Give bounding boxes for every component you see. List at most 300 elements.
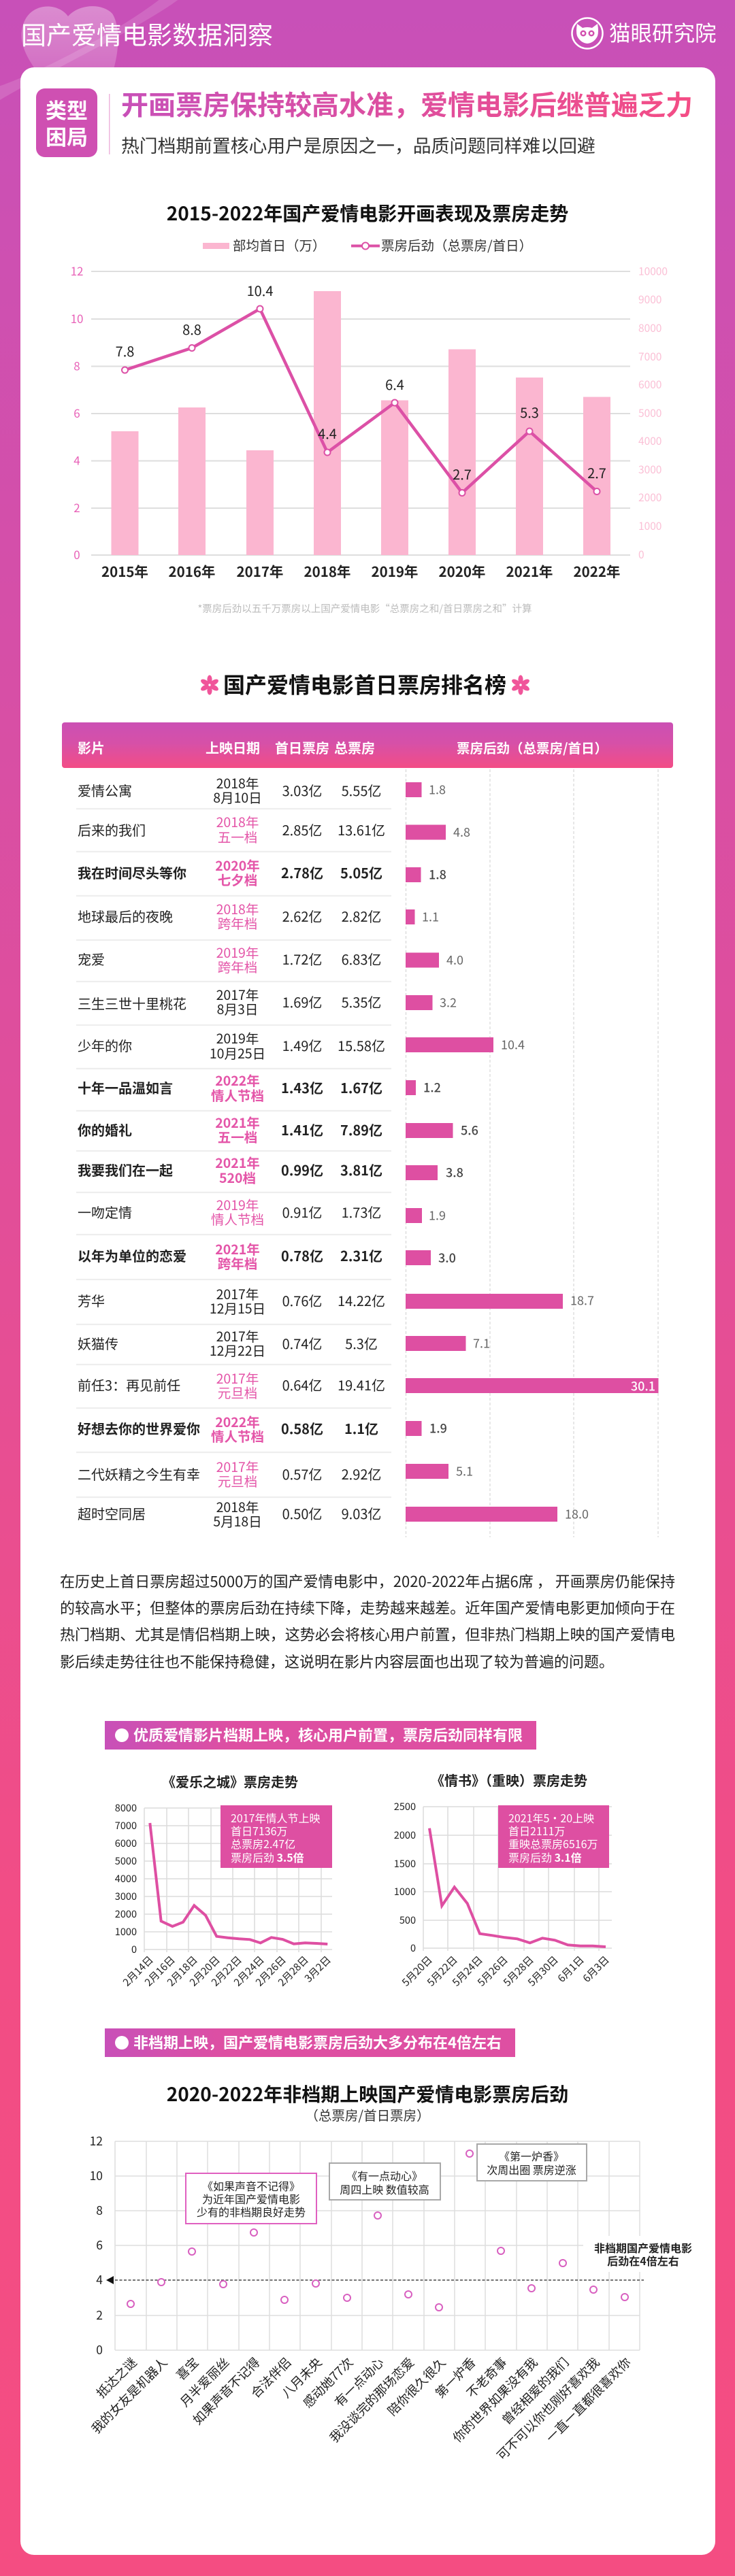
row: 我要我们在一起: 3.8: [446, 1163, 463, 1181]
row: 宠爱: 宠爱: [78, 949, 105, 969]
row: 以年为单位的恋爱: 跨年档: [218, 1253, 257, 1273]
row: 十年一品温如言: 2022年: [215, 1070, 260, 1090]
x axis movie labels: 我没谈完的那场恋爱: [325, 2354, 418, 2446]
row: 妖猫传: 2017年: [216, 1326, 259, 1345]
row: 以年为单位的恋爱: 以年为单位的恋爱: [78, 1245, 186, 1265]
row: 十年一品温如言: [78, 1070, 441, 1105]
row: 少年的你: 10月25日: [210, 1043, 265, 1063]
x axis movie labels: 八月未央: [278, 2354, 325, 2402]
left axis labels: 12: [71, 262, 83, 279]
row: 超时空同居: 5月18日: [213, 1511, 262, 1530]
callout: 有一点动心: 周四上映 数值较高: [340, 2181, 429, 2197]
callout: 首日2111万: [508, 1822, 566, 1839]
y axis labels: 500: [399, 1913, 416, 1927]
chart title: 2020-2022年非档期上映国产爱情电影票房后劲: [167, 2080, 568, 2107]
row: 二代妖精之今生有幸: 2.92亿: [342, 1464, 381, 1484]
body paragraph: 在历史上首日票房超过5000万的国产爱情电影中，2020-2022年占据6席 ， 开画票房仍能保持: [60, 1570, 675, 1592]
right axis labels: 2000: [638, 490, 662, 505]
row: 妖猫传: 妖猫传: [78, 1333, 118, 1353]
table header: 首日票房: [275, 737, 329, 757]
data labels: 6.4: [385, 374, 404, 394]
row: 爱情公寓: 8月10日: [213, 787, 262, 807]
row: 你的婚礼: 五一档: [218, 1126, 257, 1146]
row: 二代妖精之今生有幸: 5.1: [456, 1462, 473, 1480]
y axis labels: 6: [96, 2237, 103, 2254]
callout: 2017年情人节上映: [231, 1809, 321, 1826]
grid: [423, 1807, 612, 1951]
reference arrow: [106, 2276, 114, 2284]
legend: 票房后劲（总票房/首日）: [381, 235, 532, 254]
row: 好想去你的世界爱你: 2022年: [215, 1411, 260, 1431]
row: 以年为单位的恋爱: 2021年: [215, 1239, 260, 1258]
trend line: [429, 1828, 606, 1947]
row: 地球最后的夜晚: 2018年: [216, 899, 259, 918]
reference line at 4: [115, 2279, 644, 2281]
row: 地球最后的夜晚: 2.62亿: [282, 906, 322, 926]
x axis labels: 2月22日: [208, 1953, 245, 1989]
x axis labels: 5月22日: [424, 1953, 461, 1989]
table header: 票房后劲（总票房/首日）: [457, 737, 608, 757]
y axis labels: 5000: [115, 1854, 137, 1868]
headline: 开画票房保持较高水准，爱情电影后继普遍乏力: [121, 83, 693, 122]
row: 前任3：再见前任: 2017年: [216, 1368, 259, 1388]
dashed guide lines: [406, 769, 658, 1537]
table header: 上映日期: [206, 737, 260, 757]
ranking table: [62, 722, 673, 1537]
x axis labels: 2月26日: [252, 1953, 289, 1989]
row: 爱情公寓: 1.8: [429, 781, 446, 799]
y axis labels: 0: [131, 1942, 137, 1956]
row: 超时空同居: [78, 1496, 589, 1530]
body paragraph: [60, 1570, 675, 1672]
row: 芳华: 14.22亿: [338, 1290, 385, 1310]
grid: [144, 1808, 332, 1952]
row: 妖猫传: 12月22日: [210, 1340, 265, 1360]
row: 一吻定情: 1.9: [429, 1207, 446, 1224]
row: 我要我们在一起: 520档: [219, 1167, 256, 1187]
x axis movie labels: 喜宝: [172, 2354, 202, 2383]
row: 你的婚礼: 5.6: [461, 1121, 478, 1139]
row: 后来的我们: 13.61亿: [338, 820, 385, 839]
callout: 第一炉香: [477, 2144, 587, 2181]
sub headline: 热门档期前置核心用户是原因之一，品质问题同样难以回避: [121, 131, 595, 158]
x axis movie labels: [87, 2354, 634, 2464]
x axis movie labels: 不老奇事: [463, 2354, 510, 2402]
row: 二代妖精之今生有幸: 0.57亿: [282, 1464, 322, 1484]
row: 二代妖精之今生有幸: [78, 1456, 473, 1490]
y axis labels: 1000: [394, 1884, 416, 1898]
row: 你的婚礼: 7.89亿: [340, 1120, 382, 1139]
row: 前任3：再见前任: 0.64亿: [282, 1375, 322, 1394]
logo: cat eye research institute: 猫眼研究院: [609, 16, 717, 48]
x axis labels: [399, 1953, 612, 1989]
row: 爱情公寓: 5.55亿: [342, 780, 381, 800]
year labels: 2016年: [169, 561, 215, 581]
x axis movie labels: 如果声音不记得: [189, 2354, 263, 2428]
y axis labels: 1500: [394, 1856, 416, 1871]
right axis labels: 6000: [638, 377, 662, 392]
x axis labels: 2月14日: [120, 1953, 157, 1989]
y axis labels: 4000: [115, 1871, 137, 1886]
right axis labels: 10000: [638, 264, 668, 279]
callout: 2021年5·20上映: [508, 1809, 594, 1826]
row: 后来的我们: 后来的我们: [78, 820, 146, 839]
x axis labels: 2月20日: [186, 1953, 223, 1989]
row: 前任3：再见前任: 前任3：再见前任: [78, 1375, 180, 1394]
x axis movie labels: 我的女友是机器人: [87, 2354, 171, 2437]
x axis movie labels: 抵达之谜: [93, 2354, 140, 2402]
header title: 国产爱情电影数据洞察: [21, 15, 273, 52]
row: 地球最后的夜晚: 1.1: [422, 907, 439, 925]
grid: [115, 2141, 640, 2350]
row: 三生三世十里桃花: 2017年: [216, 984, 259, 1004]
table header: 总票房: [334, 737, 375, 757]
row: 地球最后的夜晚: 2.82亿: [342, 906, 381, 926]
row: 宠爱: 2019年: [216, 942, 259, 962]
row: 超时空同居: 超时空同居: [78, 1503, 146, 1523]
row: 好想去你的世界爱你: 1.1亿: [344, 1418, 378, 1438]
row: 十年一品温如言: 1.2: [423, 1079, 441, 1097]
callout: 第一炉香: 《第一炉香》: [499, 2147, 564, 2164]
line markers: [122, 306, 600, 496]
callout: 有一点动心: 《有一点动心》: [346, 2167, 423, 2184]
body paragraph: 热门档期、尤其是情侣档期上映，这势必会将核心用户前置，但非热门档期上映的国产爱情电: [60, 1623, 675, 1645]
row: 超时空同居: 9.03亿: [342, 1503, 381, 1523]
right axis labels: 0: [638, 547, 644, 562]
chart title: 《情书》（重映）票房走势: [431, 1770, 587, 1790]
x axis labels: 3月2日: [301, 1953, 334, 1986]
callout: 4x note: [583, 2236, 701, 2272]
row: 后来的我们: 五一档: [218, 826, 257, 846]
row: 芳华: [78, 1284, 594, 1318]
x axis labels: 6月1日: [555, 1953, 587, 1986]
row: 一吻定情: 情人节档: [211, 1209, 264, 1228]
row: 超时空同居: 0.50亿: [282, 1503, 322, 1523]
row: 三生三世十里桃花: 8月3日: [217, 999, 258, 1018]
row: 宠爱: 6.83亿: [342, 949, 381, 969]
row: 宠爱: [78, 942, 463, 976]
right axis labels: 3000: [638, 462, 662, 477]
callout: [220, 1805, 332, 1868]
x axis movie labels: 感动她77次: [299, 2354, 357, 2411]
table header: 影片: [78, 737, 105, 757]
row: 妖猫传: 0.74亿: [282, 1333, 322, 1353]
row: 以年为单位的恋爱: 0.78亿: [281, 1245, 323, 1265]
row: 芳华: 2017年: [216, 1284, 259, 1303]
data labels: 8.8: [182, 319, 201, 339]
y axis labels: 6000: [115, 1836, 137, 1850]
body paragraph: 的较高水平；但整体的票房后劲在持续下降，走势越来越差。近年国产爱情电影更加倾向于在: [60, 1596, 675, 1618]
left axis labels: 4: [74, 452, 80, 468]
data labels: 10.4: [247, 280, 273, 300]
x axis labels: 6月3日: [580, 1953, 612, 1986]
row: 我在时间尽头等你: 1.8: [429, 865, 446, 883]
row: 后来的我们: [78, 812, 470, 846]
left axis labels: 6: [74, 404, 80, 421]
tag: 类型困局: 困局: [46, 120, 88, 151]
left axis labels: 0: [74, 546, 80, 563]
row: 我要我们在一起: 2021年: [215, 1152, 260, 1172]
x axis labels: 2月28日: [275, 1953, 312, 1989]
row: 好想去你的世界爱你: 0.58亿: [281, 1418, 323, 1438]
callout: 第一炉香: 次周出圈 票房逆涨: [487, 2161, 576, 2177]
callout: [498, 1805, 609, 1868]
row: 后来的我们: 4.8: [453, 823, 470, 841]
y axis labels: 2500: [394, 1799, 416, 1813]
row: 芳华: 0.76亿: [282, 1290, 322, 1310]
left axis labels: 10: [71, 310, 83, 327]
banner: non-holiday releases: 非档期上映，国产爱情电影票房后劲大多分布在4倍左右: [133, 2031, 502, 2053]
row: 妖猫传: 5.3亿: [345, 1333, 378, 1353]
row: 三生三世十里桃花: 3.2: [440, 993, 457, 1011]
callout: 首日7136万: [231, 1822, 288, 1839]
callout: 4x note: 非档期国产爱情电影: [594, 2239, 692, 2256]
row: 后来的我们: 2.85亿: [282, 820, 322, 839]
row: 后来的我们: 2018年: [216, 812, 259, 831]
row: 我要我们在一起: 3.81亿: [340, 1160, 382, 1180]
x axis labels: 2月24日: [231, 1953, 267, 1989]
row: 前任3：再见前任: 元旦档: [218, 1382, 257, 1402]
y axis labels: 2000: [394, 1828, 416, 1842]
row: 你的婚礼: [78, 1112, 478, 1146]
year labels: 2019年: [372, 561, 418, 581]
row: 十年一品温如言: 情人节档: [211, 1085, 264, 1105]
x axis labels: 5月30日: [525, 1953, 561, 1989]
chart subtitle: （总票房/首日票房）: [305, 2105, 430, 2124]
body paragraph: 影后续走势往往也不能保持稳健，这说明在影片内容层面也出现了较为普遍的问题。: [60, 1650, 614, 1672]
row: 少年的你: 15.58亿: [338, 1035, 385, 1055]
row: 三生三世十里桃花: 1.69亿: [282, 992, 322, 1011]
row: 十年一品温如言: 十年一品温如言: [78, 1077, 173, 1097]
row: 少年的你: 10.4: [501, 1035, 525, 1053]
row: 二代妖精之今生有幸: 2017年: [216, 1456, 259, 1476]
right axis labels: 4000: [638, 433, 662, 448]
chart: Love Letter rerelease trend: [394, 1770, 612, 1989]
row: 二代妖精之今生有幸: 二代妖精之今生有幸: [78, 1464, 200, 1484]
row: 三生三世十里桃花: 5.35亿: [342, 992, 381, 1011]
row: 三生三世十里桃花: 三生三世十里桃花: [78, 993, 186, 1013]
x axis movie labels: 你的世界如果没有我: [448, 2354, 541, 2446]
row: 芳华: 芳华: [78, 1290, 105, 1310]
x axis movie labels: 第一炉香: [431, 2354, 479, 2402]
row: 我在时间尽头等你: 2020年: [215, 855, 260, 875]
row: 你的婚礼: 你的婚礼: [78, 1120, 132, 1139]
callout: 如果声音不记得: 少有的非档期良好走势: [197, 2203, 306, 2220]
year labels: 2021年: [506, 561, 553, 581]
chart: opening and box office legs 2015-2022: [71, 199, 668, 616]
row: 爱情公寓: 2018年: [216, 773, 259, 792]
y axis labels: 8000: [115, 1801, 137, 1815]
row: 超时空同居: 18.0: [565, 1505, 589, 1522]
row: 我在时间尽头等你: 2.78亿: [281, 863, 323, 882]
right axis labels: 1000: [638, 518, 662, 533]
left axis labels: [71, 262, 83, 563]
row: 地球最后的夜晚: 跨年档: [218, 913, 257, 933]
y axis labels: 1000: [115, 1924, 137, 1939]
footnote: *票房后劲以五千万票房以上国产爱情电影“总票房之和/首日票房之和”计算: [198, 601, 532, 616]
x axis movie labels: 月半爱丽丝: [176, 2354, 233, 2411]
row: 我在时间尽头等你: 七夕档: [218, 869, 257, 889]
x axis movie labels: 陪你很久很久: [383, 2354, 449, 2420]
row: 少年的你: 2019年: [216, 1028, 259, 1048]
y axis labels: 12: [90, 2132, 103, 2150]
banner: non-holiday releases: [105, 2028, 515, 2057]
x axis movie labels: 有一点动心: [330, 2354, 387, 2411]
x axis labels: 5月20日: [399, 1953, 436, 1989]
y axis labels: [115, 1801, 137, 1956]
callout: 重映总票房6516万: [508, 1835, 598, 1852]
x axis movie labels: 可不可以你也刚好喜欢我: [493, 2354, 603, 2464]
y axis labels: 2: [96, 2307, 103, 2324]
scatter points: [127, 2150, 628, 2311]
row: 我要我们在一起: [78, 1152, 463, 1187]
right axis labels: 9000: [638, 292, 662, 307]
row: 前任3：再见前任: [78, 1368, 659, 1402]
callout: 如果声音不记得: 为近年国产爱情电影: [202, 2190, 300, 2207]
y axis labels: 10: [90, 2167, 103, 2184]
row: 我要我们在一起: 我要我们在一起: [78, 1160, 173, 1180]
x axis movie labels: 曾经相爱的我们: [497, 2354, 572, 2428]
right axis labels: 5000: [638, 405, 662, 420]
year labels: 2015年: [101, 561, 148, 581]
chart title: 2015-2022年国产爱情电影开画表现及票房走势: [167, 199, 568, 227]
callout: 总票房2.47亿: [231, 1835, 295, 1852]
x axis labels: [120, 1953, 334, 1989]
y axis labels: 3000: [115, 1889, 137, 1903]
row: 一吻定情: 0.91亿: [282, 1202, 322, 1222]
x axis labels: 2月18日: [164, 1953, 201, 1989]
row: 前任3：再见前任: 30.1: [631, 1377, 655, 1394]
bars: average opening: [112, 291, 610, 555]
row: 好想去你的世界爱你: 1.9: [429, 1419, 447, 1437]
callout: 票房后劲 3.5倍: [231, 1849, 304, 1865]
x axis labels: 2月16日: [142, 1953, 178, 1989]
callout: 如果声音不记得: 《如果声音不记得》: [202, 2177, 300, 2194]
row: 爱情公寓: 3.03亿: [282, 780, 322, 800]
year labels: [101, 561, 620, 581]
y axis labels: 4: [96, 2271, 103, 2288]
row: 好想去你的世界爱你: 好想去你的世界爱你: [78, 1418, 200, 1438]
tag: 类型困局: [36, 88, 97, 157]
row: 爱情公寓: [78, 773, 446, 807]
y axis labels: 0: [410, 1941, 416, 1955]
row: 一吻定情: 一吻定情: [78, 1202, 132, 1222]
year labels: 2017年: [237, 561, 283, 581]
row: 十年一品温如言: 1.67亿: [340, 1077, 382, 1097]
table header: [62, 722, 673, 768]
banner: quality films: [105, 1721, 536, 1750]
row: 一吻定情: [78, 1194, 446, 1228]
row: 我要我们在一起: 0.99亿: [281, 1160, 323, 1180]
callout: 4x note: 后劲在4倍左右: [607, 2252, 679, 2269]
row: 地球最后的夜晚: 地球最后的夜晚: [78, 906, 173, 926]
row: 你的婚礼: 1.41亿: [281, 1120, 323, 1139]
chart title: 《爱乐之城》票房走势: [162, 1771, 298, 1791]
callout: 票房后劲 3.1倍: [508, 1849, 582, 1865]
decorative heart: [0, 0, 182, 102]
x axis labels: 5月26日: [474, 1953, 511, 1989]
row: 以年为单位的恋爱: 2.31亿: [340, 1245, 382, 1265]
row: 好想去你的世界爱你: [78, 1411, 447, 1445]
scatter chart: non-holiday box office legs: [87, 2080, 701, 2464]
row: 以年为单位的恋爱: 3.0: [438, 1249, 456, 1267]
year labels: 2018年: [304, 561, 350, 581]
row: 宠爱: 4.0: [446, 951, 463, 969]
row: 芳华: 18.7: [570, 1291, 594, 1309]
divider beside tag: [109, 94, 110, 154]
row: 一吻定情: 1.73亿: [342, 1202, 381, 1222]
y axis labels: 0: [96, 2341, 103, 2358]
x axis movie labels: 一直一直都很喜欢你: [542, 2354, 634, 2446]
row: 十年一品温如言: 1.43亿: [281, 1077, 323, 1097]
row: 你的婚礼: 2021年: [215, 1112, 260, 1132]
year labels: 2022年: [574, 561, 620, 581]
data labels: 7.8: [116, 341, 134, 361]
trend line: [150, 1823, 327, 1944]
grid lines: [91, 271, 630, 555]
row: 以年为单位的恋爱: [78, 1239, 456, 1273]
row: 妖猫传: 7.1: [473, 1335, 490, 1352]
right axis labels: [638, 264, 668, 562]
banner: quality films: 优质爱情影片档期上映，核心用户前置，票房后劲同样有限: [133, 1724, 523, 1745]
line: box office legs: [125, 309, 597, 492]
data labels: [116, 280, 606, 484]
x axis movie labels: 合法伴侣: [247, 2354, 295, 2402]
row: 一吻定情: 2019年: [216, 1194, 259, 1214]
row: 二代妖精之今生有幸: 元旦档: [218, 1471, 257, 1490]
callout: 如果声音不记得: [186, 2173, 316, 2224]
row: 我在时间尽头等你: 我在时间尽头等你: [78, 863, 186, 882]
legend: [203, 235, 532, 254]
row: 芳华: 12月15日: [210, 1298, 265, 1318]
y axis labels: [90, 2132, 103, 2358]
legend: 部均首日（万）: [233, 235, 326, 254]
right axis labels: 8000: [638, 320, 662, 335]
y axis labels: 8: [96, 2202, 103, 2219]
row: 少年的你: 1.49亿: [282, 1035, 322, 1055]
data labels: 2.7: [453, 464, 472, 484]
row: 妖猫传: [78, 1326, 490, 1360]
tag: 类型困局: 类型: [46, 94, 88, 124]
row: 地球最后的夜晚: [78, 899, 439, 933]
chart: La La Land trend: [115, 1771, 334, 1989]
row: 超时空同居: 2018年: [216, 1496, 259, 1516]
y axis labels: [394, 1799, 416, 1955]
y axis labels: 7000: [115, 1818, 137, 1833]
row: 少年的你: 少年的你: [78, 1035, 132, 1055]
left axis labels: 8: [74, 356, 80, 374]
year labels: 2020年: [439, 561, 485, 581]
row: 少年的你: [78, 1028, 525, 1063]
right axis labels: 7000: [638, 349, 662, 364]
data labels: 4.4: [318, 423, 337, 443]
row: 前任3：再见前任: 19.41亿: [338, 1375, 385, 1394]
x axis labels: 5月24日: [449, 1953, 486, 1989]
row: 宠爱: 跨年档: [218, 956, 257, 976]
row: 三生三世十里桃花: [78, 984, 457, 1018]
row: 我在时间尽头等你: 5.05亿: [340, 863, 382, 882]
row: 我在时间尽头等你: [78, 855, 446, 889]
section title with flowers: 国产爱情电影首日票房排名榜: [223, 668, 506, 699]
callout: 有一点动心: [329, 2163, 440, 2200]
y axis labels: 2000: [115, 1907, 137, 1921]
row: 好想去你的世界爱你: 情人节档: [211, 1426, 264, 1445]
row: 宠爱: 1.72亿: [282, 949, 322, 969]
row separators: [76, 809, 391, 1497]
data labels: 5.3: [520, 402, 539, 422]
data labels: 2.7: [587, 463, 606, 482]
row: 爱情公寓: 爱情公寓: [78, 780, 132, 800]
